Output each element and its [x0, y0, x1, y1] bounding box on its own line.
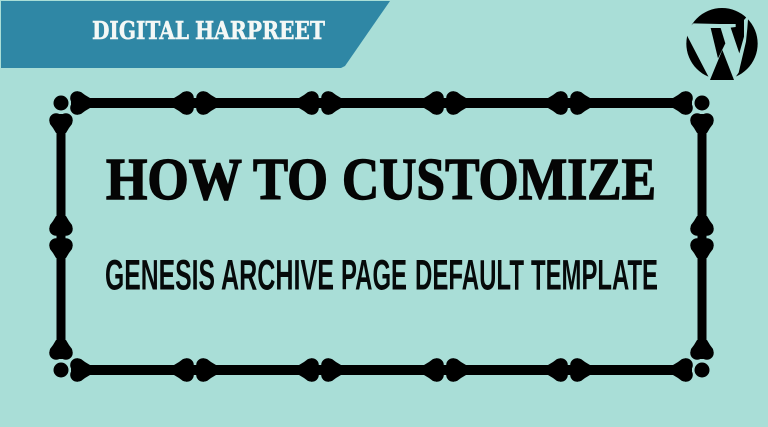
title: CUSTOMIZE	[342, 146, 656, 212]
subtitle: ARCHIVE	[221, 252, 334, 300]
right border bones	[690, 113, 714, 360]
frame: bone border	[49, 91, 714, 382]
top border bones	[70, 91, 693, 115]
title	[106, 146, 656, 212]
banner	[1, 1, 390, 68]
title: HOW	[106, 146, 242, 212]
subtitle: TEMPLATE	[531, 252, 658, 300]
bottom border bones	[70, 358, 693, 382]
subtitle: PAGE	[341, 252, 407, 300]
banner title: DIGITAL	[92, 16, 189, 45]
icon: WordPress logo	[685, 8, 758, 80]
banner title: HARPREET	[195, 16, 325, 45]
corner dots	[54, 96, 710, 378]
banner title	[92, 16, 325, 45]
subtitle: GENESIS	[105, 252, 215, 300]
subtitle	[105, 252, 658, 300]
title: TO	[253, 146, 328, 212]
left border bones	[49, 113, 73, 360]
subtitle: DEFAULT	[415, 252, 524, 300]
